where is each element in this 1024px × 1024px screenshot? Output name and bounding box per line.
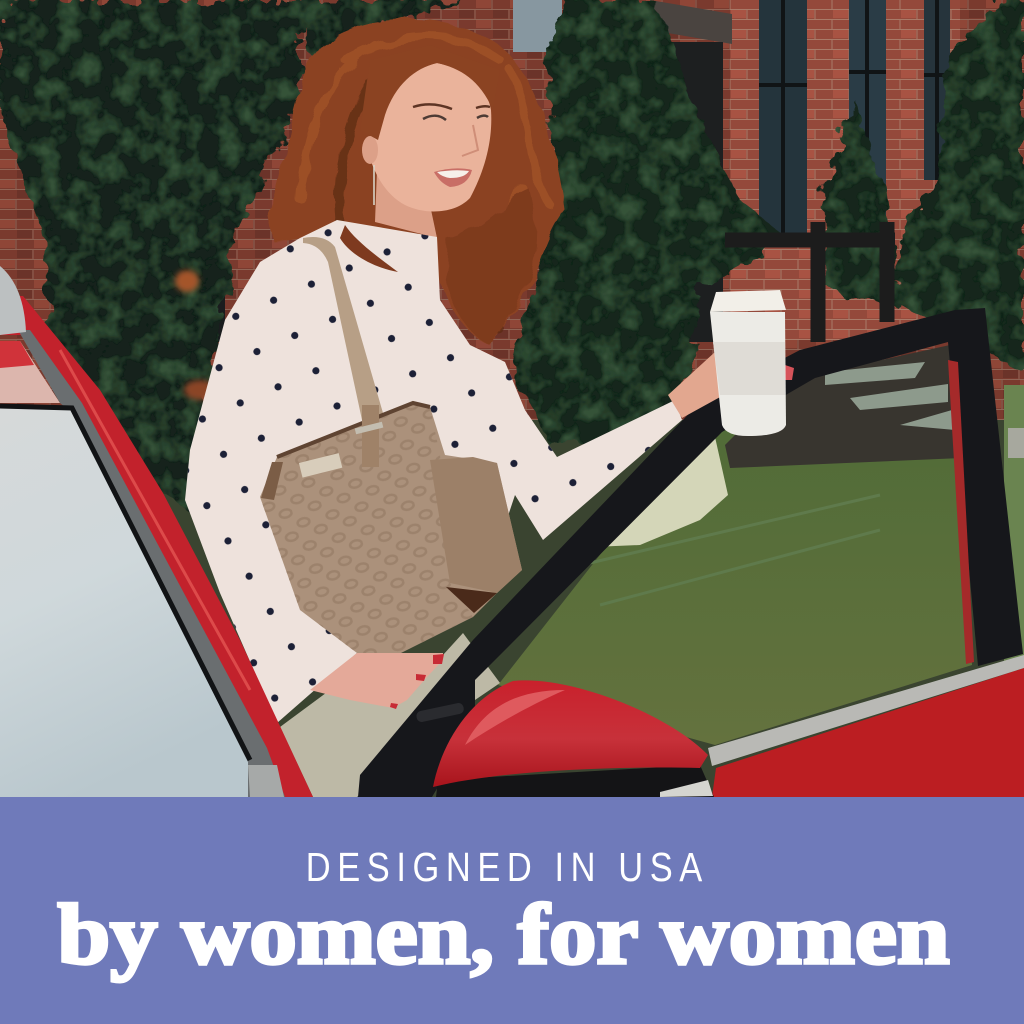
bag leopard texture bbox=[260, 403, 473, 657]
dark garden bed bbox=[725, 345, 962, 468]
hair lock on shoulder bbox=[340, 225, 398, 272]
earring bbox=[373, 165, 375, 205]
window: upper centre bbox=[513, 0, 562, 52]
hair shadows bbox=[339, 70, 500, 330]
banner headline: by women, for women bbox=[58, 886, 949, 982]
bag side pocket bbox=[430, 457, 522, 593]
dark doorway bbox=[665, 42, 723, 342]
neck bbox=[375, 170, 437, 238]
ear bbox=[362, 136, 378, 164]
bag buckle bbox=[355, 422, 383, 434]
banner subtitle: DESIGNED IN USA bbox=[306, 845, 703, 891]
red car bbox=[0, 266, 1024, 797]
left tree bbox=[0, 0, 300, 510]
mirror base bbox=[436, 765, 714, 797]
wiper mount bbox=[248, 765, 284, 797]
window mullions bbox=[759, 0, 950, 235]
car roof pillar bbox=[0, 296, 313, 797]
lower door panel bbox=[712, 668, 1024, 797]
window: tall right bbox=[849, 0, 886, 235]
travel tumbler bbox=[710, 290, 786, 436]
tumbler sleeve bbox=[713, 342, 785, 395]
smile bbox=[434, 168, 472, 187]
bag shoulder strap bbox=[303, 237, 385, 420]
banner bbox=[0, 797, 1024, 1024]
trees bbox=[0, 0, 1024, 510]
eyebrows and eyes bbox=[413, 104, 490, 109]
blouse cuff seen through window bbox=[592, 437, 728, 547]
fingertips behind tumbler bbox=[782, 364, 794, 380]
hand holding tumbler bbox=[668, 352, 794, 418]
right tree bbox=[895, 0, 1024, 372]
wing mirror bbox=[433, 680, 708, 787]
roof rail bbox=[0, 266, 26, 335]
front hair lock over blouse bbox=[446, 190, 536, 345]
hair back bbox=[267, 19, 565, 345]
gray pillar bbox=[18, 330, 285, 797]
mirror highlight bbox=[465, 690, 565, 745]
bag underside shadow bbox=[446, 587, 497, 613]
tote bag body bbox=[260, 403, 522, 657]
mirror chrome tip bbox=[660, 780, 713, 797]
bag top trim bbox=[277, 403, 430, 457]
bag label bbox=[299, 453, 342, 478]
blouse bbox=[185, 220, 682, 723]
roof panel bbox=[0, 341, 60, 403]
photo background: brick building bbox=[0, 0, 1024, 800]
centre tree bbox=[510, 0, 790, 445]
black railing bbox=[725, 222, 895, 342]
nose shadow bbox=[462, 125, 478, 156]
window: tall centre right bbox=[759, 0, 807, 235]
reflected steps bbox=[825, 362, 955, 430]
sidewalk strip bbox=[1008, 428, 1024, 458]
view through car window bbox=[498, 345, 972, 745]
inner door red stripe bbox=[948, 360, 974, 664]
tumbler body bbox=[710, 312, 786, 436]
lawn through window bbox=[498, 345, 972, 745]
reflected fence lines bbox=[560, 495, 880, 605]
woman bbox=[185, 19, 728, 797]
bag strap tab bbox=[362, 405, 379, 467]
roof red tint bbox=[0, 341, 34, 368]
red pillar highlight bbox=[60, 350, 250, 690]
roof ledge bbox=[650, 0, 732, 44]
windshield black edge bbox=[0, 406, 250, 760]
tumbler lid bbox=[710, 290, 786, 312]
door handle cover bbox=[415, 702, 465, 723]
dark side window left bbox=[208, 262, 225, 342]
trousers bbox=[280, 633, 500, 797]
fingernails bbox=[390, 654, 444, 709]
orange foliage accents bbox=[175, 270, 216, 400]
windshield bbox=[0, 408, 248, 797]
lawn at far right bbox=[1004, 385, 1024, 665]
window: far right bbox=[924, 0, 950, 180]
hair fringe bbox=[360, 45, 500, 140]
small top tree bbox=[295, 0, 465, 60]
bag side strap left bbox=[261, 462, 283, 500]
blouse dots bbox=[185, 220, 682, 723]
lower hand bbox=[310, 653, 443, 708]
chrome window strip bbox=[708, 655, 1024, 766]
door frame bbox=[358, 308, 1023, 797]
right tree small bbox=[822, 100, 900, 310]
face bbox=[368, 63, 491, 211]
hair highlights bbox=[300, 38, 550, 280]
